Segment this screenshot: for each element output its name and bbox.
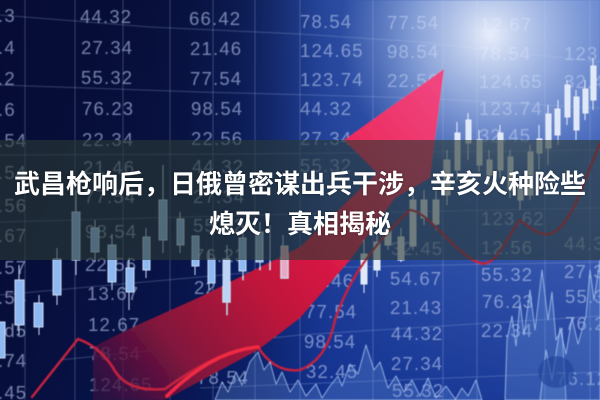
number columns: 13.67 (196, 307, 248, 328)
red rising arrow (93, 69, 444, 400)
number columns: 13.67 (87, 283, 139, 304)
number columns: 27.34 (81, 37, 133, 58)
number columns: 66.42 (189, 8, 241, 29)
number columns: 21.43 (390, 297, 442, 318)
number columns: 21.46 (190, 38, 242, 59)
title band (0, 140, 600, 260)
number columns: 78.54 (300, 11, 352, 32)
number columns: 27.34 (300, 128, 352, 149)
red trend lines (32, 143, 600, 397)
number columns: 21.46 (302, 270, 354, 291)
number columns: 77.54 (190, 68, 242, 89)
number columns: 22.34 (481, 320, 533, 341)
number columns: 77.54 (387, 12, 439, 33)
number columns: 12.67 (88, 314, 140, 335)
number columns: 55.32 (300, 155, 352, 176)
number columns: 78.54 (89, 343, 141, 364)
number columns: 55.32 (481, 264, 533, 285)
number columns: 123.74 (300, 69, 364, 90)
number columns: 21.46 (83, 157, 135, 178)
number columns: 98.54 (387, 41, 439, 62)
number columns: 76.23 (82, 98, 134, 119)
number columns: 12.67 (197, 337, 249, 358)
number columns: 124.65 (89, 374, 153, 395)
number columns: 32.45 (391, 238, 443, 259)
number columns: 44.32 (300, 98, 352, 119)
number columns: 98.54 (85, 221, 137, 242)
number columns: 78.54 (197, 367, 249, 388)
number columns: 98.54 (304, 331, 356, 352)
number columns: 22.56 (191, 128, 243, 149)
title: 熄灭！真相揭秘 (209, 209, 391, 239)
number columns: 44.32 (80, 6, 132, 27)
title: 武昌枪响后，日俄曾密谋出兵干涉，辛亥火种险些 (14, 169, 586, 199)
number columns: 54.67 (390, 268, 442, 289)
number columns: 123.62 (481, 208, 545, 229)
number columns: 123.74 (479, 98, 543, 119)
title (14, 169, 586, 239)
number columns: 78.54 (479, 43, 531, 64)
number columns: 32.45 (306, 361, 358, 382)
dark smudge at lower right (538, 356, 574, 388)
number columns: 27.34 (391, 353, 443, 374)
number columns: 76.23 (482, 291, 534, 312)
number columns: 44.32 (192, 156, 244, 177)
number columns: 12.56 (481, 237, 533, 258)
number columns: 55.32 (81, 67, 133, 88)
number columns: 124.65 (479, 71, 543, 92)
number columns: 27.34 (193, 186, 245, 207)
number columns: 76.23 (194, 245, 246, 266)
number columns: 22.34 (82, 129, 134, 150)
candlesticks (0, 165, 288, 358)
number columns: 22.56 (387, 70, 439, 91)
number columns: 55.32 (193, 215, 245, 236)
waveform chart (215, 260, 600, 400)
number columns: 77.54 (84, 186, 136, 207)
number columns: 22.56 (85, 254, 137, 275)
number columns: 12.67 (480, 14, 532, 35)
number columns: 22.34 (194, 277, 246, 298)
number columns: 32.45 (479, 125, 531, 146)
number columns: 98.54 (191, 98, 243, 119)
number columns: 44.32 (391, 323, 443, 344)
number columns: 124.65 (300, 40, 364, 61)
number columns: 77.54 (305, 301, 357, 322)
